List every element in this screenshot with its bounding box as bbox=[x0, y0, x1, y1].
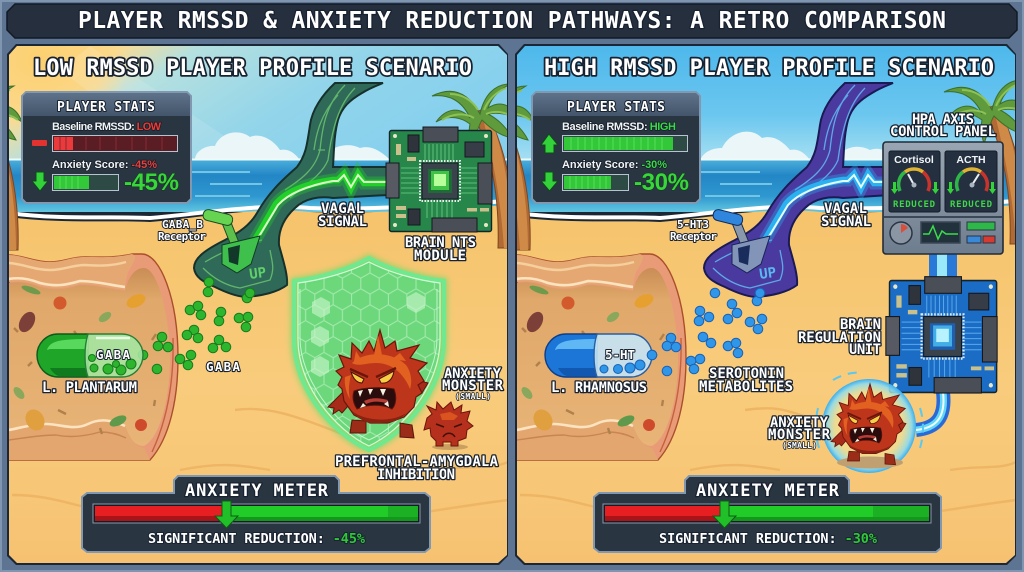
sea bbox=[517, 158, 1016, 212]
palm trees bbox=[0, 84, 518, 250]
labels: MODULE bbox=[414, 248, 466, 264]
labels: VAGAL bbox=[321, 201, 364, 217]
sky background bbox=[517, 46, 1016, 162]
anxiety monster (large) bbox=[328, 330, 428, 438]
HPA axis control panel: REDUCED bbox=[950, 200, 993, 210]
palm trees bbox=[448, 80, 1024, 250]
sand beach bbox=[517, 201, 1016, 565]
labels: HPA AXIS bbox=[912, 112, 974, 128]
gut cross-section bbox=[517, 254, 686, 460]
labels: SIGNAL bbox=[821, 214, 871, 230]
energy shield bbox=[294, 258, 444, 450]
HPA axis control panel: Cortisol bbox=[894, 154, 934, 166]
labels: GABA bbox=[206, 359, 240, 374]
player stats card: -45% bbox=[124, 169, 179, 196]
sand beach bbox=[9, 201, 508, 565]
serotonin molecules bbox=[647, 288, 767, 376]
lever switch bbox=[712, 209, 770, 273]
panel heading: low: LOW RMSSD PLAYER PROFILE SCENARIO bbox=[33, 56, 472, 81]
labels: SEROTONIN bbox=[709, 366, 784, 382]
player stats card: PLAYER STATS bbox=[57, 100, 155, 115]
labels: Receptor bbox=[670, 230, 717, 243]
lever switch bbox=[202, 209, 260, 273]
anxiety monster (small) bbox=[831, 384, 906, 468]
labels: PREFRONTAL-AMYGDALA bbox=[335, 454, 499, 470]
HPA axis to brain conduit bbox=[916, 253, 957, 430]
capsule: L. plantarum bbox=[37, 334, 143, 377]
player stats card: PLAYER STATS bbox=[567, 100, 665, 115]
labels: SIGNAL bbox=[318, 214, 367, 230]
vagus nerve pathway: UP bbox=[248, 265, 267, 283]
labels bbox=[551, 112, 996, 450]
labels: METABOLITES bbox=[699, 379, 793, 395]
GABA molecules bbox=[138, 277, 255, 374]
anxiety monster (small) bbox=[424, 402, 473, 450]
capsule: L. rhamnosus bbox=[545, 334, 657, 377]
player stats card: Anxiety Score: -30% bbox=[562, 159, 667, 171]
panel: low RMSSD scenario bbox=[7, 44, 508, 565]
anxiety meter bbox=[82, 476, 430, 552]
player stats card: Anxiety Score: -45% bbox=[52, 159, 157, 171]
player stats card bbox=[22, 92, 191, 203]
HPA axis control panel bbox=[883, 142, 1003, 254]
labels: (SMALL) bbox=[455, 392, 491, 401]
anxiety meter: ANXIETY METER bbox=[696, 481, 840, 501]
labels: MONSTER bbox=[442, 378, 504, 394]
sky background bbox=[9, 46, 507, 158]
player stats card: Baseline RMSSD: LOW bbox=[52, 121, 162, 133]
labels: GABA bbox=[96, 347, 130, 362]
labels: INHIBITION bbox=[377, 467, 455, 483]
labels: ANXIETY bbox=[770, 415, 829, 431]
panel heading: high: HIGH RMSSD PLAYER PROFILE SCENARIO bbox=[544, 56, 994, 81]
labels: UNIT bbox=[849, 342, 881, 358]
anxiety meter: SIGNIFICANT REDUCTION: -45% bbox=[148, 531, 366, 547]
title bar bbox=[7, 4, 1017, 38]
labels: BRAIN NTS bbox=[405, 235, 476, 251]
sea bbox=[9, 158, 508, 212]
labels: Receptor bbox=[158, 230, 206, 243]
panel: high RMSSD scenario bbox=[515, 44, 1016, 565]
labels: ANXIETY bbox=[444, 366, 502, 382]
player stats card: Baseline RMSSD: HIGH bbox=[562, 121, 676, 133]
labels: MONSTER bbox=[768, 427, 831, 443]
player stats card bbox=[532, 92, 700, 203]
vagus nerve pathway bbox=[704, 83, 893, 297]
vagus nerve pathway bbox=[194, 83, 387, 297]
labels: (SMALL) bbox=[782, 441, 817, 450]
brain regulation unit bbox=[886, 277, 997, 393]
vagus nerve pathway: UP bbox=[758, 265, 777, 283]
clouds bbox=[701, 132, 882, 158]
anxiety meter bbox=[594, 476, 941, 552]
anxiety meter: SIGNIFICANT REDUCTION: -30% bbox=[659, 531, 878, 547]
player stats card: -30% bbox=[634, 169, 689, 196]
labels: GABA_B bbox=[162, 218, 203, 231]
labels: REGULATION bbox=[798, 330, 881, 346]
labels: 5-HT3 bbox=[677, 218, 709, 231]
labels: 5-HT bbox=[605, 347, 635, 362]
labels: BRAIN bbox=[840, 317, 881, 333]
clouds bbox=[195, 132, 390, 160]
HPA axis control panel: ACTH bbox=[956, 154, 986, 166]
title bar: PLAYER RMSSD & ANXIETY REDUCTION PATHWAYS: A RETRO COMPARISON bbox=[78, 8, 946, 34]
labels: L. PLANTARUM bbox=[42, 380, 137, 396]
HPA axis control panel: REDUCED bbox=[893, 200, 936, 210]
gut cross-section bbox=[9, 254, 178, 460]
labels: L. RHAMNOSUS bbox=[551, 380, 647, 396]
labels: CONTROL PANEL bbox=[890, 124, 996, 140]
labels bbox=[42, 201, 504, 483]
labels: VAGAL bbox=[824, 201, 867, 217]
anxiety meter: ANXIETY METER bbox=[185, 481, 329, 501]
brain NTS module bbox=[386, 127, 492, 232]
protective bubble bbox=[816, 373, 923, 473]
